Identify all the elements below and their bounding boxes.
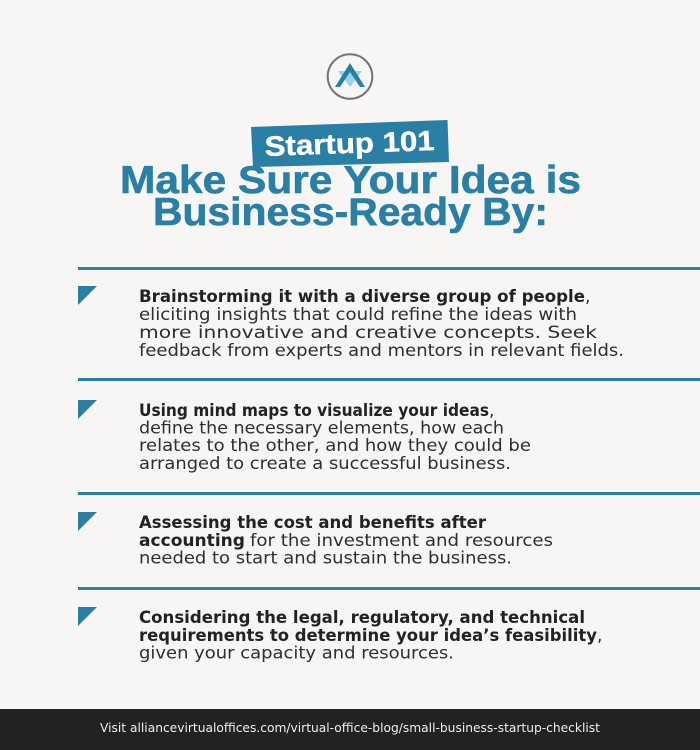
panel: legal and technical step: requirements to determine your idea’s feasibility bbox=[139, 626, 597, 646]
icon: company logo bbox=[328, 54, 372, 99]
footer bar: Visit alliancevirtualoffices.com/virtual-office-blog/small-business-startup-checklist bbox=[100, 721, 600, 735]
panel: brainstorming step bbox=[78, 267, 700, 361]
title: Business-Ready By: bbox=[153, 191, 548, 234]
panel: mind maps step: , bbox=[489, 401, 494, 421]
panel: brainstorming step: eliciting insights that could refine the ideas with bbox=[139, 305, 577, 325]
badge: Startup 101: Startup 101 bbox=[264, 125, 435, 162]
panel: mind maps step: relates to the other, and how they could be bbox=[139, 436, 531, 456]
panel: mind maps step: arranged to create a successful business. bbox=[139, 454, 511, 474]
panel: brainstorming step: more innovative and creative concepts. Seek bbox=[139, 323, 597, 343]
panel: cost and benefits step: needed to start and sustain the business. bbox=[139, 548, 512, 568]
title: Make Sure Your Idea is bbox=[120, 159, 581, 202]
panel: legal and technical step: Considering the legal, regulatory, and technical bbox=[139, 608, 585, 628]
panel: cost and benefits step bbox=[78, 492, 700, 568]
panel: mind maps step: define the necessary elements, how each bbox=[139, 418, 504, 438]
panel: mind maps step: Using mind maps to visualize your ideas bbox=[139, 401, 489, 421]
panel: legal and technical step: given your capacity and resources. bbox=[139, 644, 454, 664]
panel: legal and technical step bbox=[78, 587, 700, 664]
panel: cost and benefits step: accounting bbox=[139, 531, 245, 551]
title bbox=[120, 159, 581, 234]
panel: legal and technical step: , bbox=[597, 626, 602, 646]
panel: mind maps step bbox=[78, 378, 700, 474]
panel: brainstorming step: Brainstorming it with a diverse group of people bbox=[139, 287, 585, 307]
panel: cost and benefits step: for the investment and resources bbox=[250, 531, 553, 551]
panel: brainstorming step: feedback from experts and mentors in relevant fields. bbox=[139, 341, 624, 361]
footer bar bbox=[0, 709, 700, 750]
badge: Startup 101 bbox=[251, 120, 449, 167]
panel: brainstorming step: , bbox=[585, 287, 590, 307]
panel: cost and benefits step: Assessing the cost and benefits after bbox=[139, 513, 487, 533]
